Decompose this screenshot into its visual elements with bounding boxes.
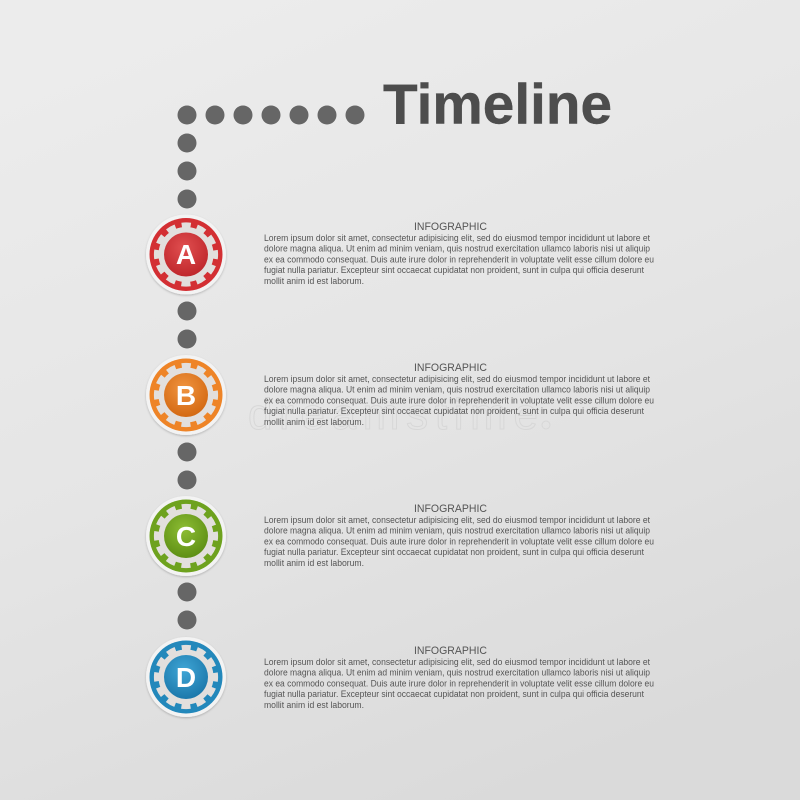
- text block C: fugiat nulla pariatur. Excepteur sint occaecat cupidatat non proident, sunt in culpa qui officia deserunt: [264, 547, 645, 557]
- title: Timeline: [383, 72, 612, 136]
- text block D: [264, 645, 654, 710]
- text block D: ex ea commodo consequat. Duis aute irure dolor in reprehenderit in voluptate velit esse cillum dolore eu: [264, 678, 654, 688]
- text block D: Lorem ipsum dolor sit amet, consectetur adipisicing elit, sed do eiusmod tempor incididunt ut labore et: [264, 657, 651, 667]
- text block B: ex ea commodo consequat. Duis aute irure dolor in reprehenderit in voluptate velit esse cillum dolore eu: [264, 395, 654, 405]
- watermark: dreamstime: [248, 390, 538, 439]
- text block B: mollit anim id est laborum.: [264, 417, 364, 427]
- text block B: fugiat nulla pariatur. Excepteur sint occaecat cupidatat non proident, sunt in culpa qui officia deserunt: [264, 406, 645, 416]
- text block A: fugiat nulla pariatur. Excepteur sint occaecat cupidatat non proident, sunt in culpa qui officia deserunt: [264, 265, 645, 275]
- text block B: INFOGRAPHIC: [414, 362, 487, 374]
- text block A: dolore magna aliqua. Ut enim ad minim veniam, quis nostrud exercitation ullamco laboris nisi ut aliquip: [264, 244, 650, 254]
- text block A: ex ea commodo consequat. Duis aute irure dolor in reprehenderit in voluptate velit esse cillum dolore eu: [264, 254, 654, 264]
- badge D: [146, 637, 226, 717]
- badge B: [146, 355, 226, 435]
- text block A: mollit anim id est laborum.: [264, 276, 364, 286]
- text block D: mollit anim id est laborum.: [264, 700, 364, 710]
- badge C: C: [176, 521, 196, 552]
- dotted timeline path: [178, 106, 364, 630]
- text block C: dolore magna aliqua. Ut enim ad minim veniam, quis nostrud exercitation ullamco laboris nisi ut aliquip: [264, 526, 650, 536]
- text block D: dolore magna aliqua. Ut enim ad minim veniam, quis nostrud exercitation ullamco laboris nisi ut aliquip: [264, 668, 650, 678]
- badge D: D: [176, 662, 196, 693]
- badge B: B: [176, 380, 196, 411]
- badge A: [146, 214, 226, 294]
- text block B: [264, 362, 654, 427]
- text block C: ex ea commodo consequat. Duis aute irure dolor in reprehenderit in voluptate velit esse cillum dolore eu: [264, 536, 654, 546]
- text block C: Lorem ipsum dolor sit amet, consectetur adipisicing elit, sed do eiusmod tempor incididunt ut labore et: [264, 515, 651, 525]
- text block D: INFOGRAPHIC: [414, 645, 487, 657]
- text block C: mollit anim id est laborum.: [264, 558, 364, 568]
- text block C: INFOGRAPHIC: [414, 503, 487, 515]
- text block D: fugiat nulla pariatur. Excepteur sint occaecat cupidatat non proident, sunt in culpa qui officia deserunt: [264, 689, 645, 699]
- text block B: dolore magna aliqua. Ut enim ad minim veniam, quis nostrud exercitation ullamco laboris nisi ut aliquip: [264, 385, 650, 395]
- badge A: A: [176, 239, 196, 270]
- text block B: Lorem ipsum dolor sit amet, consectetur adipisicing elit, sed do eiusmod tempor incididunt ut labore et: [264, 374, 651, 384]
- text block A: Lorem ipsum dolor sit amet, consectetur adipisicing elit, sed do eiusmod tempor incididunt ut labore et: [264, 233, 651, 243]
- text block A: INFOGRAPHIC: [414, 221, 487, 233]
- badge C: [146, 496, 226, 576]
- text block A: [264, 221, 654, 286]
- text block C: [264, 503, 654, 568]
